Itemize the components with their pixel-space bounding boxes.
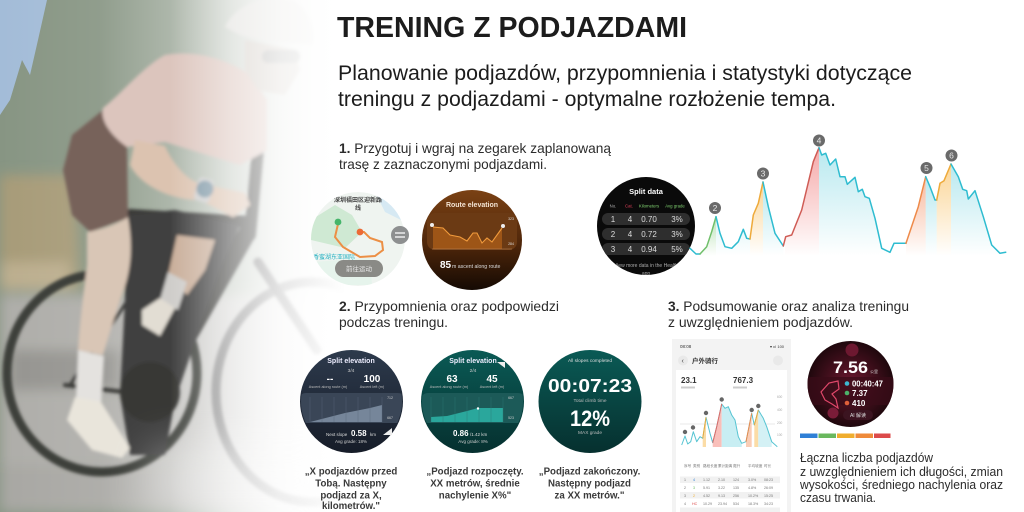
watch: split data: 0.70: [641, 215, 657, 224]
summary description: wysokości, średniego nachylenia oraz: [799, 478, 1003, 492]
watch: all slopes completed: Total climb time: [573, 398, 607, 404]
watch: training summary: [805, 341, 897, 427]
watch: split elevation in progress: 667: [508, 396, 514, 400]
watch: split elevation upcoming: Ascent along route (m): [309, 385, 348, 389]
watch: training summary: 7.56: [833, 358, 868, 377]
soft white wash at lower edge of photo: [150, 450, 345, 512]
phone screenshot: ride summary: 600: [777, 395, 783, 399]
subtitle: treningu z podjazdami - optymalne rozłożenie tempa.: [338, 88, 836, 111]
elevation profile chart: 3: [761, 168, 766, 178]
cyclist jersey: [102, 54, 267, 165]
watch: training summary: 00:40:47: [852, 380, 884, 388]
caption: climb started: XX metrów, średnie: [430, 478, 520, 490]
smartwatch on wrist: [193, 176, 215, 204]
watch: route elevation: Route elevation: [446, 202, 498, 209]
step 3 text: [668, 298, 909, 330]
phone screenshot: ride summary: 400: [777, 408, 783, 412]
watch: route elevation: 85: [440, 260, 452, 271]
bicycle front wheel: [210, 278, 320, 505]
phone splits table: 爬升: [733, 463, 741, 468]
watch: split elevation in progress: 45: [486, 374, 498, 385]
cyclist sock: [76, 350, 104, 405]
phone screenshot: ride summary: 23.1: [681, 376, 697, 385]
caption: climb completed: „Podjazd zakończony.: [539, 466, 641, 478]
watch: split data: 0.72: [641, 230, 657, 239]
watch: training summary: 7.37: [852, 389, 868, 398]
step 2 text: [339, 298, 559, 330]
phone splits table: 3: [693, 486, 695, 490]
watch: training summary: 公里: [870, 368, 878, 374]
elevation profile chart: 2: [713, 203, 718, 213]
watch: split elevation upcoming: Ascent left (m): [360, 385, 385, 389]
phone splits table: 23.94: [718, 502, 727, 506]
watch: route elevation: m ascent along route: [452, 264, 501, 270]
phone screenshot: ride summary: 767.3: [733, 376, 754, 385]
watch: split elevation upcoming: Split elevation: [327, 358, 375, 365]
watch: split elevation upcoming: 0.58: [351, 429, 367, 438]
cyclist head and helmet: [227, 14, 298, 66]
intensity colour bar: [800, 434, 890, 438]
phone splits table: 序号: [684, 463, 692, 468]
watch: split data: 4: [628, 230, 633, 239]
watch: split elevation upcoming: 667: [387, 416, 393, 420]
phone splits table: HC: [692, 502, 698, 506]
watch: all slopes completed: 00:07:23: [548, 375, 632, 396]
caption: upcoming climbs: kilometrów.": [322, 501, 380, 512]
watch: all slopes completed: [538, 350, 642, 453]
watch: split elevation upcoming: --: [327, 374, 333, 385]
phone splits table: 3.22: [718, 486, 725, 490]
cyclist arm: [130, 140, 250, 217]
caption: climb completed: za XX metrów.": [555, 490, 624, 502]
caption: upcoming climbs: Tobą. Następny: [315, 478, 387, 490]
step 2 text: podczas treningu.: [339, 314, 448, 330]
phone splits table: 3: [684, 494, 686, 498]
summary description: z uwzględnieniem ich długości, zmian: [800, 465, 1003, 479]
phone splits table: 时长: [764, 463, 772, 468]
watch: split elevation in progress: 0.86: [453, 429, 469, 438]
phone splits table: 累计距离: [718, 463, 733, 468]
watch: split elevation in progress: Avg grade: 8%: [458, 439, 488, 444]
phone splits table: 平均坡度: [748, 463, 763, 468]
phone splits table: 5.91: [703, 486, 710, 490]
phone splits table: 9.13: [718, 494, 725, 498]
watch: split elevation in progress: [420, 350, 526, 453]
cyclist far leg: [168, 235, 215, 295]
background photo: cyclist on mountain road: [0, 0, 322, 512]
cyclist and bicycle: [0, 14, 320, 505]
subtitle: Planowanie podjazdów, przypomnienia i statystyki dotyczące: [338, 62, 912, 85]
cyclist shorts: [63, 110, 128, 232]
caption: upcoming climbs: podjazd za X,: [320, 490, 382, 502]
white wash over background: [84, 0, 322, 512]
watch: split elevation in progress: 2/4: [470, 368, 477, 374]
phone splits table: 15:25: [764, 494, 773, 498]
phone splits table: 135: [733, 486, 739, 490]
phone splits table: 4.52: [703, 494, 710, 498]
phone splits table: 2: [693, 494, 695, 498]
watch: split elevation upcoming: Avg grade: 18%: [335, 439, 367, 444]
caption: climb completed: [539, 466, 641, 502]
watch: route map: 前往运动: [346, 264, 372, 273]
caption: climb started: nachylenie X%": [439, 490, 511, 502]
phone screenshot: ride summary: 08:08: [680, 344, 692, 349]
watch: split data: 2: [611, 230, 616, 239]
phone splits table: 18.3%: [748, 502, 759, 506]
watch: split elevation upcoming: 712: [387, 396, 393, 400]
summary description: Łączna liczba podjazdów: [800, 451, 934, 465]
watch: split elevation in progress: 523: [508, 416, 514, 420]
watch: route map: 线: [355, 204, 361, 212]
phone screenshot: ride summary: [672, 339, 791, 512]
watch: training summary: AI 解读: [850, 412, 866, 419]
watch: split elevation in progress: Ascent left (m): [480, 385, 505, 389]
phone screenshot: ride summary: 户外骑行: [692, 356, 718, 365]
watch: split data: 3%: [671, 230, 683, 239]
watch: split data: 4: [628, 245, 633, 254]
phone splits table: [680, 463, 780, 512]
cyclist shoe: [67, 397, 130, 458]
step 3 text: 3. Podsumowanie oraz analiza treningu: [668, 298, 909, 314]
watch: split data: View more data in the Health: [614, 263, 678, 269]
phone screenshot: ride summary: ‹: [682, 358, 684, 365]
summary description: czasu trwania.: [800, 491, 876, 505]
step 2 text: 2. Przypomnienia oraz podpowiedzi: [339, 298, 559, 314]
watch: split elevation in progress: /1.42 km: [470, 432, 488, 437]
caption: upcoming climbs: [305, 466, 397, 512]
watch: split elevation upcoming: [298, 350, 406, 453]
phone splits table: 34:23: [764, 502, 773, 506]
caption: climb started: „Podjazd rozpoczęty.: [426, 466, 524, 478]
phone splits table: 534: [733, 502, 739, 506]
watch: split data: app: [642, 271, 650, 277]
watch: all slopes completed: All slopes completed: [568, 358, 612, 364]
watch: split elevation upcoming: Next slope: [326, 432, 348, 437]
watch: split elevation in progress: 63: [446, 374, 458, 385]
phone splits table: 类别: [693, 463, 701, 468]
watch: split data: 0.94: [641, 245, 657, 254]
title: TRENING Z PODJAZDAMI: [337, 12, 687, 44]
watch: split data: 4: [628, 215, 633, 224]
watch: split elevation upcoming: 100: [364, 374, 381, 385]
phone splits table: 2.10: [718, 478, 725, 482]
elevation profile chart: 4: [817, 136, 822, 146]
watch: split elevation upcoming: km: [370, 432, 376, 437]
bicycle rear wheel: [7, 274, 197, 472]
watch: split elevation upcoming: 3/4: [348, 368, 355, 374]
caption: climb started: [426, 466, 524, 502]
watch: split elevation in progress: Split elevation: [449, 358, 497, 365]
watch: split data: Avg grade: [665, 204, 685, 208]
phone splits table: 4: [693, 478, 695, 482]
phone splits table: 10.29: [703, 502, 712, 506]
phone mini elevation chart: [680, 404, 777, 447]
step 3 text: z uwzględnieniem podjazdów.: [668, 314, 853, 330]
watch: split data: [597, 177, 695, 277]
phone splits table: 3.0%: [748, 478, 757, 482]
phone splits table: 26:09: [764, 486, 773, 490]
summary description: [799, 451, 1003, 505]
phone splits table: 256: [733, 494, 739, 498]
phone splits table: 2: [684, 486, 686, 490]
caption: upcoming climbs: „X podjazdów przed: [305, 466, 397, 478]
phone splits table: 4.8%: [748, 486, 757, 490]
white wash over rider: [170, 0, 345, 512]
watch: split data: Split data: [629, 187, 664, 196]
caption: climb completed: Następny podjazd: [548, 478, 631, 490]
watch: route map: 香蜜湖东亚国际: [313, 253, 355, 261]
phone screenshot: ride summary: 100: [777, 433, 783, 437]
elevation profile chart: 5: [924, 163, 929, 173]
phone splits table: 10.2%: [748, 494, 759, 498]
elevation profile chart: 6: [949, 150, 954, 160]
watch: route elevation: 284: [508, 242, 514, 246]
watch: split elevation in progress: Ascent along route (m): [430, 385, 469, 389]
phone screenshot: ride summary: ▾ ııl 100: [770, 344, 785, 349]
watch: split data: 3: [611, 245, 616, 254]
phone splits table: 1: [684, 478, 686, 482]
elevation profile chart: [690, 134, 1006, 256]
subtitle: [338, 62, 912, 111]
phone screenshot: ride summary: 200: [777, 421, 783, 425]
step 1 text: [339, 140, 611, 172]
watch: split data: 3%: [671, 215, 683, 224]
step 1 text: trasę z zaznaczonymi podjazdami.: [339, 156, 547, 172]
watch: split data: 5%: [671, 245, 683, 254]
watch: training summary: 410: [852, 399, 866, 408]
watch: split data: Cat.: [625, 204, 633, 208]
watch: all slopes completed: 12%: [570, 406, 610, 431]
phone splits table: 08:23: [764, 478, 773, 482]
watch: route elevation: 323: [508, 217, 514, 221]
phone splits table: 路段长度: [703, 463, 718, 468]
watch: route map: 深圳福田区迎新路: [334, 196, 382, 204]
phone splits table: 1.12: [703, 478, 710, 482]
phone splits table: 4: [684, 502, 686, 506]
cyclist leg: [78, 217, 131, 355]
step 1 text: 1. Przygotuj i wgraj na zegarek zaplanowaną: [339, 140, 611, 156]
watch: split data: Kilometers: [639, 204, 659, 208]
bicycle frame: [65, 150, 317, 395]
phone splits table: 124: [733, 478, 739, 482]
watch: all slopes completed: MAX grade: [578, 430, 602, 436]
watch: route map: [311, 192, 409, 286]
watch: split data: No.: [610, 204, 616, 208]
watch: route elevation: [422, 190, 522, 290]
watch: split data: 1: [611, 215, 616, 224]
